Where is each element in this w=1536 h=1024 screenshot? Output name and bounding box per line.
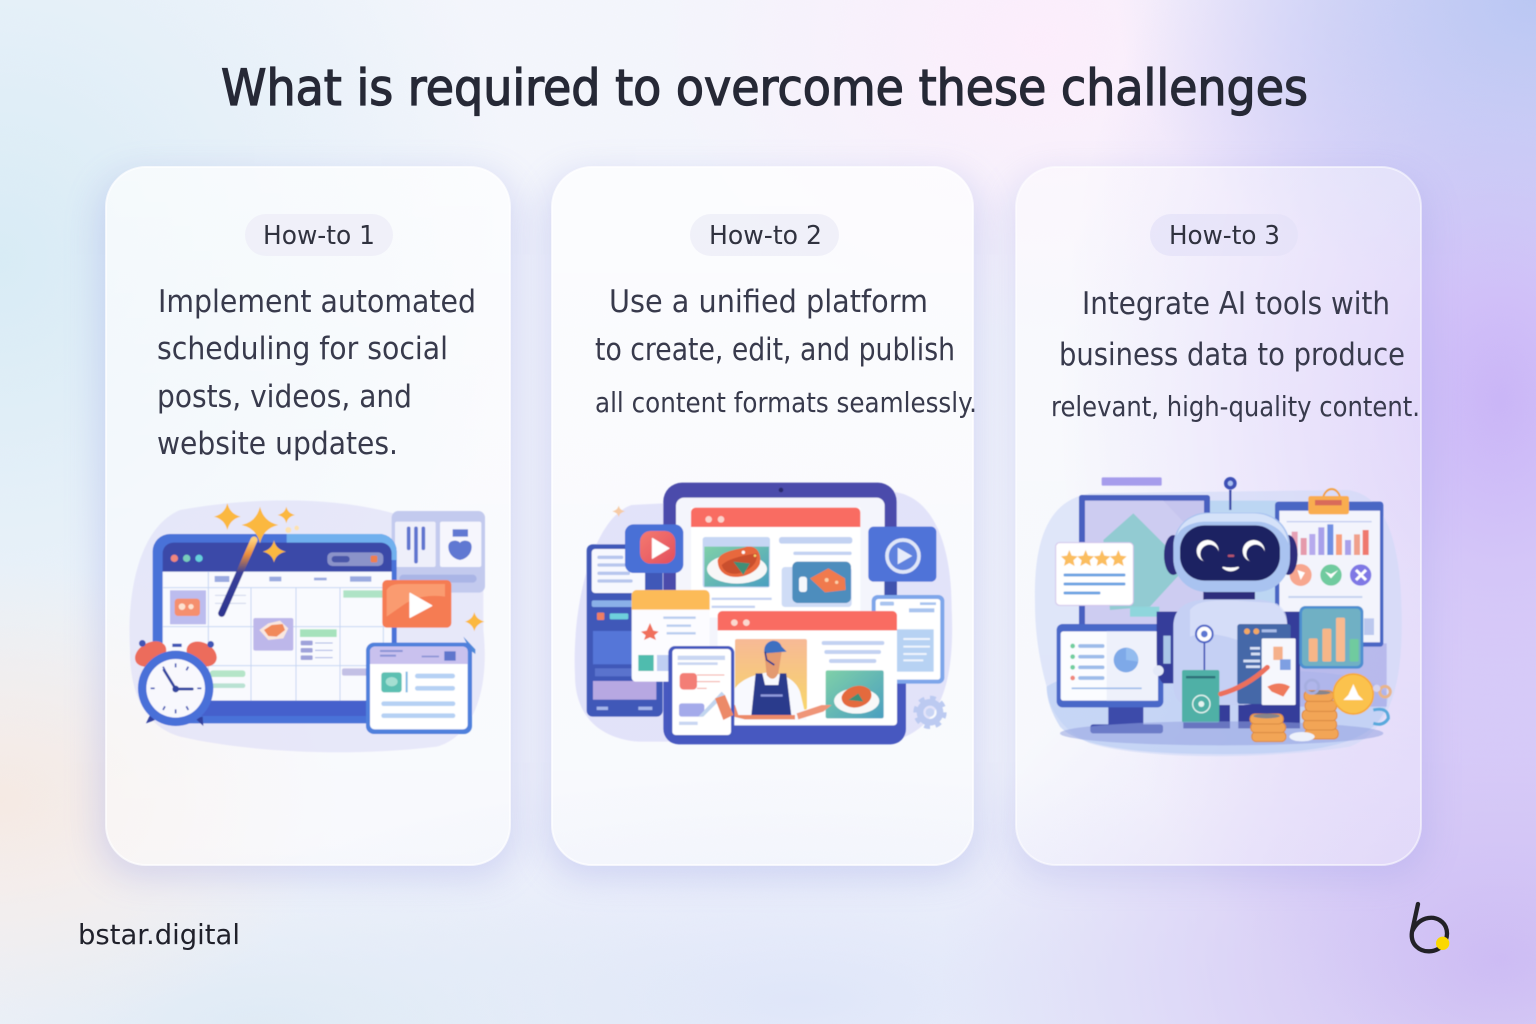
icon: top-right food tiles [392,511,485,593]
badge: how-to 3: How-to 3 [1169,221,1280,251]
review card with stars [1056,543,1133,605]
front monitor [1057,624,1163,733]
phone card [668,646,734,738]
left phone panel [587,544,663,717]
green tablet [1182,670,1219,723]
text: how-to 2 description: to create, edit, and publish [595,332,955,368]
yellow card with star [632,590,710,682]
browser window: top [691,508,860,618]
badge: how-to 3 [1150,214,1298,256]
text: how-to 1 description: scheduling for social [157,331,448,367]
text: how-to 1 description [157,284,476,462]
text: how-to 2 description [595,284,977,419]
badge: how-to 1 [245,214,393,256]
icon: faint sparkle [612,506,625,517]
text: how-to 2 description: Use a unified platform [609,284,928,320]
icon: left video button [625,524,683,573]
badge: how-to 2: How-to 2 [709,221,822,251]
coin stacks [1060,674,1390,745]
icon: brand logo [1412,904,1449,951]
icon: orange video play [382,580,451,628]
illustration: unified content platform [575,483,952,744]
panel: how-to 2 [546,167,979,876]
icon: gear [915,698,945,727]
browser window: bottom with chef [718,611,897,725]
panel: how-to 1 [100,167,516,876]
device panel on robot [1237,624,1296,705]
text: how-to 1 description: posts, videos, and [157,379,412,415]
back monitor [1079,495,1210,628]
robot [1153,477,1300,728]
small bar chart card [1299,606,1363,669]
text: how-to 1 description: Implement automated [158,284,476,320]
badge: how-to 2 [690,214,839,256]
icon: magic wand [222,540,254,613]
illustration: scheduling calendar with clock [130,500,485,752]
text: how-to 3 description: Integrate AI tools with [1082,286,1390,322]
icon: right video button [868,527,936,598]
badge: how-to 1: How-to 1 [263,221,375,251]
illustration: AI robot with business data [1035,477,1402,756]
main tablet [663,483,906,744]
icon: content card [366,637,475,734]
text: how-to 3 description [1051,286,1420,423]
text: how-to 1 description: website updates. [157,426,398,462]
calendar tablet [153,534,397,723]
icon: alarm clock [131,636,221,726]
right side panel [872,595,944,684]
text: how-to 3 description: relevant, high-quality content. [1051,390,1420,423]
text: how-to 3 description: business data to produce [1059,337,1405,373]
back panels [1210,501,1387,707]
clipboard with bar chart [1275,489,1383,647]
pointer [1221,667,1267,694]
text: how-to 2 description: all content formats seamlessly. [595,386,977,419]
chef figure [713,641,832,720]
panel: how-to 3 [1010,167,1427,876]
brand name: bstar.digital [78,918,240,951]
title: What is required to overcome these challenges [221,59,1308,117]
icon: sparkles [214,503,484,631]
